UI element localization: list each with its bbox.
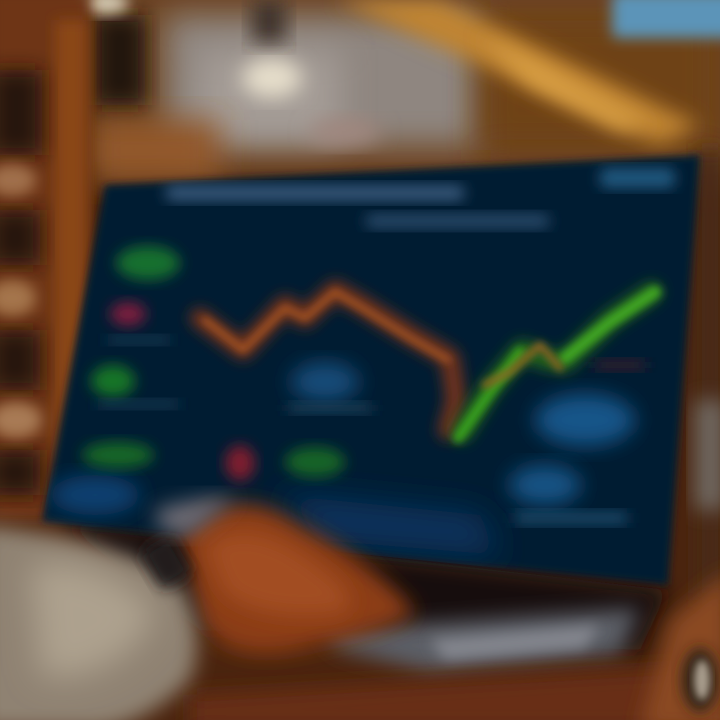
line chart: red/orange section — [200, 290, 456, 430]
line chart: green rising section — [458, 292, 655, 438]
hand — [180, 504, 415, 654]
blue blobs — [288, 362, 635, 524]
laptop body shadow — [60, 520, 668, 650]
left stat blocks — [82, 246, 345, 481]
laptop screen — [42, 155, 700, 585]
desk — [190, 570, 720, 720]
keyboard — [320, 608, 640, 672]
ceiling lamp — [81, 0, 381, 146]
wooden shelf at left — [0, 0, 90, 520]
screen bottom glow — [50, 475, 500, 555]
red dots on right of chart — [595, 360, 645, 370]
blue window top right — [612, 0, 720, 38]
ceiling beam — [335, 0, 700, 145]
shirt sleeve — [0, 497, 235, 720]
screen title text blur — [165, 168, 675, 228]
